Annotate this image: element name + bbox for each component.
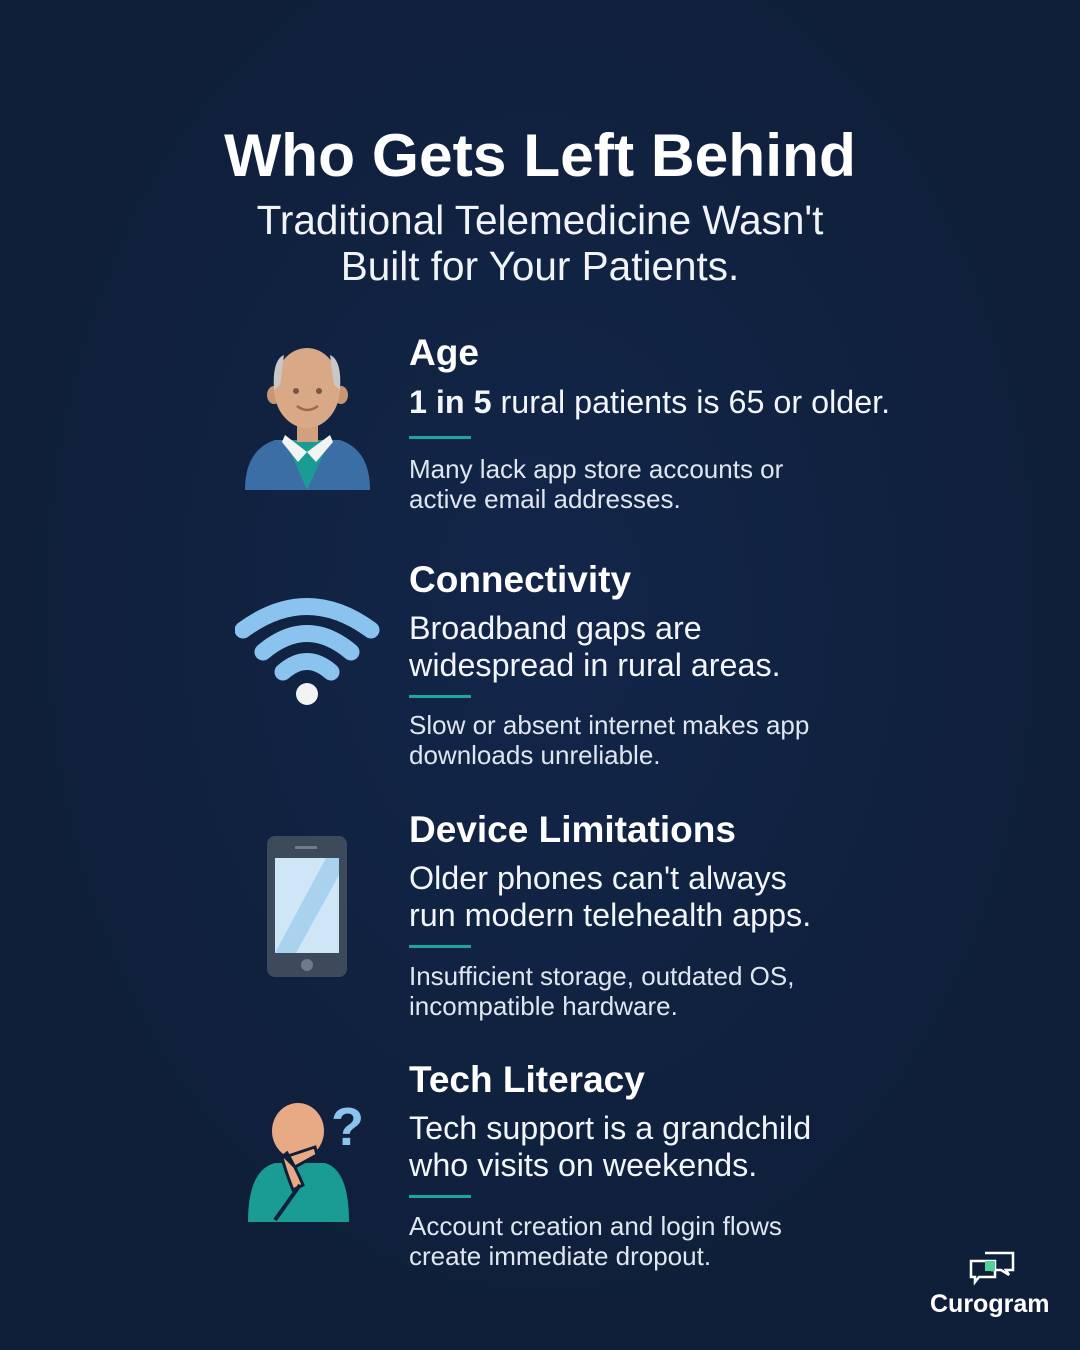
detail: active email addresses. [409, 484, 681, 514]
heading: device: Device Limitations [409, 809, 736, 850]
stat: Older phones can't always [409, 860, 787, 896]
stat: Tech support is a grandchild [409, 1110, 811, 1146]
subtitle [257, 197, 824, 289]
stat: 1 in 5 rural patients is 65 or older. [409, 384, 890, 420]
subtitle: Built for Your Patients. [341, 243, 739, 289]
detail: Account creation and login flows [409, 1211, 782, 1241]
icon: confused person [248, 1097, 364, 1222]
section: device [409, 809, 811, 1021]
detail: Slow or absent internet makes app [409, 710, 809, 740]
stat: run modern telehealth apps. [409, 897, 811, 933]
heading: age: Age [409, 332, 479, 373]
stat: Broadband gaps are [409, 610, 702, 646]
icon: phone [267, 836, 347, 977]
heading: tech: Tech Literacy [409, 1059, 645, 1100]
detail [409, 961, 794, 1021]
detail: downloads unreliable. [409, 740, 661, 770]
detail: create immediate dropout. [409, 1241, 711, 1271]
detail [409, 454, 783, 514]
detail: incompatible hardware. [409, 991, 678, 1021]
detail [409, 710, 809, 770]
section: tech literacy [409, 1059, 811, 1271]
icon: chat bubbles [970, 1252, 1014, 1286]
subtitle: Traditional Telemedicine Wasn't [257, 197, 823, 243]
icon: confused person: ? [331, 1097, 364, 1157]
title: Who Gets Left Behind [224, 121, 856, 189]
section: age [409, 332, 890, 514]
stat: widespread in rural areas. [409, 647, 781, 683]
stat [409, 1110, 811, 1183]
stat: who visits on weekends. [409, 1147, 757, 1183]
detail: Insufficient storage, outdated OS, [409, 961, 794, 991]
detail [409, 1211, 782, 1271]
icon: wifi [235, 598, 380, 705]
stat [409, 610, 781, 683]
section: connectivity [409, 559, 809, 770]
logo [930, 1252, 1049, 1318]
detail: Many lack app store accounts or [409, 454, 783, 484]
brand name: Curogram [930, 1290, 1049, 1318]
icon: elderly man [245, 348, 370, 490]
stat [409, 860, 811, 933]
heading: connectivity: Connectivity [409, 559, 631, 600]
